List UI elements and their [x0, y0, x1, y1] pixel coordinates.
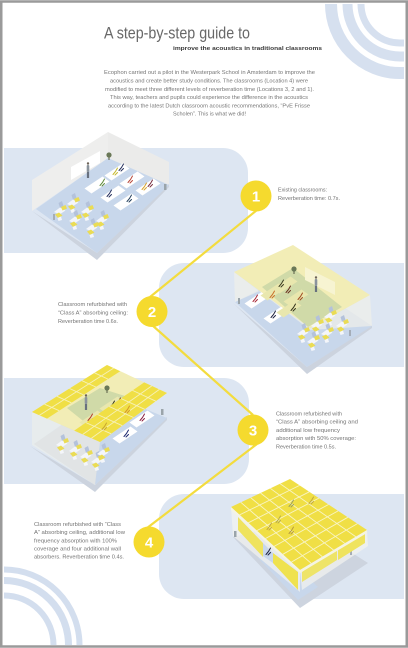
panel: step 4 background: [159, 494, 404, 599]
step 3 text: absorption with 50% coverage:: [276, 436, 356, 442]
ceiling panels with grid: [231, 479, 367, 573]
intro paragraph: This way, teachers and pupils could experience the difference in the acoustics: [110, 95, 308, 101]
intro paragraph: modified to meet three different levels of reverberation time (Locations 3, 2 and 1).: [105, 87, 314, 93]
step 3 text: Reverberation time 0.5s.: [276, 444, 336, 450]
connector: step 1 to 2: [150, 210, 257, 297]
wall absorber: right: [302, 547, 337, 582]
absorbing ceiling: [234, 245, 370, 328]
intro paragraph: Ecophon carried out a pilot in the Westerpark School in Amsterdam to improve the: [104, 70, 315, 76]
step 4 text: [34, 522, 126, 560]
intro paragraph: Scholen”. This is what we did!: [173, 112, 247, 118]
step 4 text: frequency absorption with 100%: [34, 538, 117, 544]
step 1 marker: 1: [252, 188, 260, 206]
step 3 text: additional low frequency: [276, 428, 340, 434]
wall absorber: left: [238, 517, 263, 557]
step 3 text: [276, 412, 358, 450]
intro paragraph: acoustics and create better study conditions. The classrooms (Location 4) were: [110, 78, 308, 84]
step 1 text: Reverberation time: 0.7s.: [278, 196, 340, 202]
title: A step-by-step guide to: [104, 24, 250, 42]
wall absorber: front: [273, 553, 298, 590]
decorative rings: bottom left: [4, 570, 80, 645]
connector: step 2 to 3: [152, 325, 253, 415]
step 4 text: Classroom refurbished with “Class: [34, 522, 121, 528]
classroom 3: ceiling and 50% low frequency absorption: [30, 365, 167, 492]
step 3 marker: 3: [249, 422, 257, 440]
step 4 text: absorbers. Reverberation time 0.4s.: [34, 554, 124, 560]
panel: step 3 background: [4, 378, 249, 484]
step 2 marker: 2: [148, 304, 156, 321]
step 3 text: “Class A” absorbing ceiling and: [276, 420, 358, 426]
step 1 text: [278, 188, 340, 202]
connector: step 3 to 4: [147, 444, 257, 528]
step 3 marker: [238, 414, 268, 446]
step 1 marker: [240, 180, 272, 212]
step 4 marker: [134, 526, 164, 558]
intro paragraph: according to the latest Dutch classroom acoustic recommendations, “PvE Frisse: [108, 104, 310, 110]
ceiling panel band: front: [74, 382, 167, 442]
intro paragraph: [104, 70, 315, 118]
step 3 text: Classroom refurbished with: [276, 412, 342, 418]
step 4 marker: 4: [145, 534, 154, 552]
subtitle: improve the acoustics in traditional classrooms: [173, 46, 322, 52]
classroom 4: full coverage and wall absorbers: [231, 479, 368, 608]
ceiling panel band: back: [32, 365, 120, 419]
ceiling base: [32, 365, 167, 442]
decorative rings: top right: [331, 4, 404, 73]
wall absorber: far right: [338, 530, 365, 560]
step 2 text: Reverberation time 0.6s.: [58, 319, 118, 325]
step 2 text: “Class A” absorbing ceiling:: [58, 310, 128, 316]
classroom 1: existing room: [32, 132, 169, 260]
step 2 text: Classroom refurbished with: [58, 302, 127, 308]
step 4 text: A” absorbing ceiling, additional low: [34, 530, 126, 536]
step 4 text: coverage and four additional wall: [34, 546, 121, 552]
step 1 text: Existing classrooms:: [278, 188, 327, 194]
step 2 marker: [136, 296, 168, 327]
classroom 2: absorbing ceiling: [233, 245, 372, 374]
step 2 text: [58, 302, 128, 325]
panel: step 2 background: [159, 263, 404, 367]
panel: step 1 background: [4, 148, 248, 253]
